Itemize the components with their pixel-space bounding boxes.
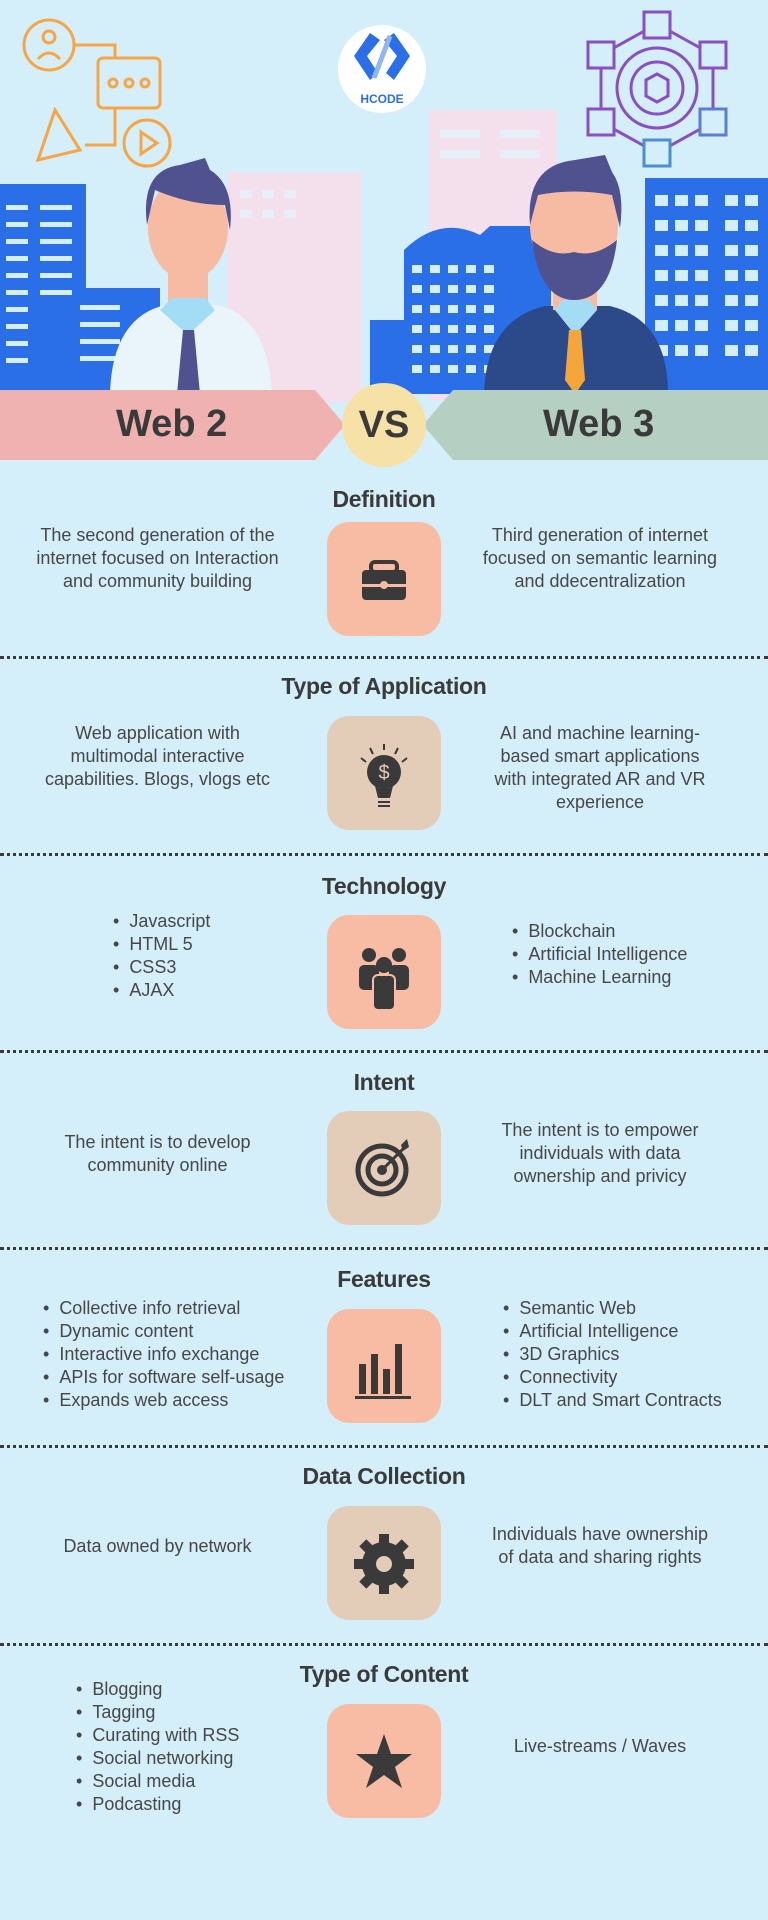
icon: gear (327, 1506, 441, 1620)
icon: lightbulb: $ (378, 762, 390, 784)
list: web2 content: Social networking (92, 1748, 233, 1768)
text: web3 definition: Third generation of internet (492, 525, 708, 545)
list: web2 content: Social media (92, 1771, 195, 1791)
list: web2 content: Blogging (92, 1679, 162, 1699)
icon: bar chart (327, 1309, 441, 1423)
right blue buildings (370, 178, 768, 394)
banner: Web 3 (423, 390, 768, 460)
logo HCODE: HCODE (360, 92, 404, 106)
logo HCODE (338, 25, 426, 113)
text: web3 application (494, 723, 706, 812)
list: web3 technology (512, 921, 687, 987)
list: web3 technology: Machine Learning (528, 967, 671, 987)
list: web3 features: DLT and Smart Contracts (519, 1390, 722, 1410)
man web3 (484, 155, 668, 394)
icon: target (327, 1111, 441, 1225)
text: web2 intent: The intent is to develop (64, 1132, 251, 1152)
list: web3 technology: Artificial Intelligence (528, 944, 687, 964)
list: web3 features: 3D Graphics (519, 1344, 619, 1364)
list: web2 features (44, 1298, 284, 1410)
text: web2 data: Data owned by network (63, 1536, 252, 1556)
list: web2 content: Podcasting (92, 1794, 181, 1814)
text: web3 data: Individuals have ownership (492, 1524, 708, 1544)
text: web3 definition (483, 525, 717, 591)
icon: social media orange (24, 20, 170, 166)
icon: star (327, 1704, 441, 1818)
text: web2 intent: community online (87, 1155, 228, 1175)
text: web2 application: Web application with (75, 723, 240, 743)
text: web3 data (492, 1524, 708, 1567)
icon: briefcase (327, 522, 441, 636)
man web2 (110, 158, 272, 394)
text: web3 intent: ownership and privicy (513, 1166, 687, 1186)
text: web3 intent: individuals with data (519, 1143, 681, 1163)
heading: Type of Application: Type of Application (281, 673, 487, 699)
list: web2 content (76, 1679, 239, 1814)
heading: Type of Content: Type of Content (300, 1661, 468, 1687)
text: web3 application: based smart applications (500, 746, 700, 766)
icon: lightbulb (327, 716, 441, 830)
text: web2 definition (36, 525, 279, 591)
heading: Intent: Intent (354, 1069, 414, 1095)
text: web3 definition: and ddecentralization (514, 571, 686, 591)
heading: Data Collection: Data Collection (303, 1463, 465, 1489)
text: web2 application: capabilities. Blogs, vlogs etc (45, 769, 270, 789)
text: web3 content: Live-streams / Waves (514, 1736, 686, 1756)
list: web3 features (504, 1298, 722, 1410)
text: web3 data: of data and sharing rights (498, 1547, 702, 1567)
text: web3 application: with integrated AR and VR (494, 769, 706, 789)
text: web2 definition: internet focused on Interaction (36, 548, 279, 568)
list: web2 technology: Javascript (129, 911, 210, 931)
text: web2 intent (64, 1132, 251, 1175)
text: web2 definition: The second generation of the (40, 525, 275, 545)
list: web3 features: Artificial Intelligence (519, 1321, 678, 1341)
text: web2 application (45, 723, 270, 789)
list: web2 features: Dynamic content (59, 1321, 193, 1341)
list: web2 content: Curating with RSS (92, 1725, 239, 1745)
VS circle: VS (359, 404, 409, 446)
banner: Web 3: Web 3 (543, 403, 654, 445)
banner: Web 2 (0, 390, 345, 460)
text: web2 application: multimodal interactive (70, 746, 245, 766)
list: web2 features: Expands web access (59, 1390, 228, 1410)
list: web2 features: APIs for software self-usage (59, 1367, 284, 1387)
text: web2 definition: and community building (63, 571, 252, 591)
list: web3 technology: Blockchain (528, 921, 615, 941)
list: web2 features: Collective info retrieval (59, 1298, 240, 1318)
text: web3 definition: focused on semantic learning (483, 548, 717, 568)
list: web2 technology (114, 911, 210, 1000)
list: web2 features: Interactive info exchange (59, 1344, 259, 1364)
text: web3 intent: The intent is to empower (501, 1120, 699, 1140)
text: web3 application: AI and machine learning- (500, 723, 700, 743)
pink background buildings (227, 110, 557, 402)
list: web2 technology: CSS3 (129, 957, 176, 977)
banner: Web 2: Web 2 (116, 403, 227, 445)
text: web3 application: experience (556, 792, 644, 812)
icon: blockchain network purple (588, 12, 726, 166)
list: web2 technology: HTML 5 (129, 934, 193, 954)
list: web3 features: Semantic Web (519, 1298, 636, 1318)
left blue buildings (0, 184, 160, 394)
header illustration (0, 10, 768, 402)
VS circle (342, 383, 426, 467)
text: web3 intent (501, 1120, 699, 1186)
heading: Features: Features (337, 1266, 431, 1292)
list: web2 technology: AJAX (129, 980, 174, 1000)
list: web3 features: Connectivity (519, 1367, 617, 1387)
heading: Definition: Definition (332, 486, 436, 512)
icon: people (327, 915, 441, 1029)
list: web2 content: Tagging (92, 1702, 155, 1722)
heading: Technology: Technology (322, 873, 446, 899)
